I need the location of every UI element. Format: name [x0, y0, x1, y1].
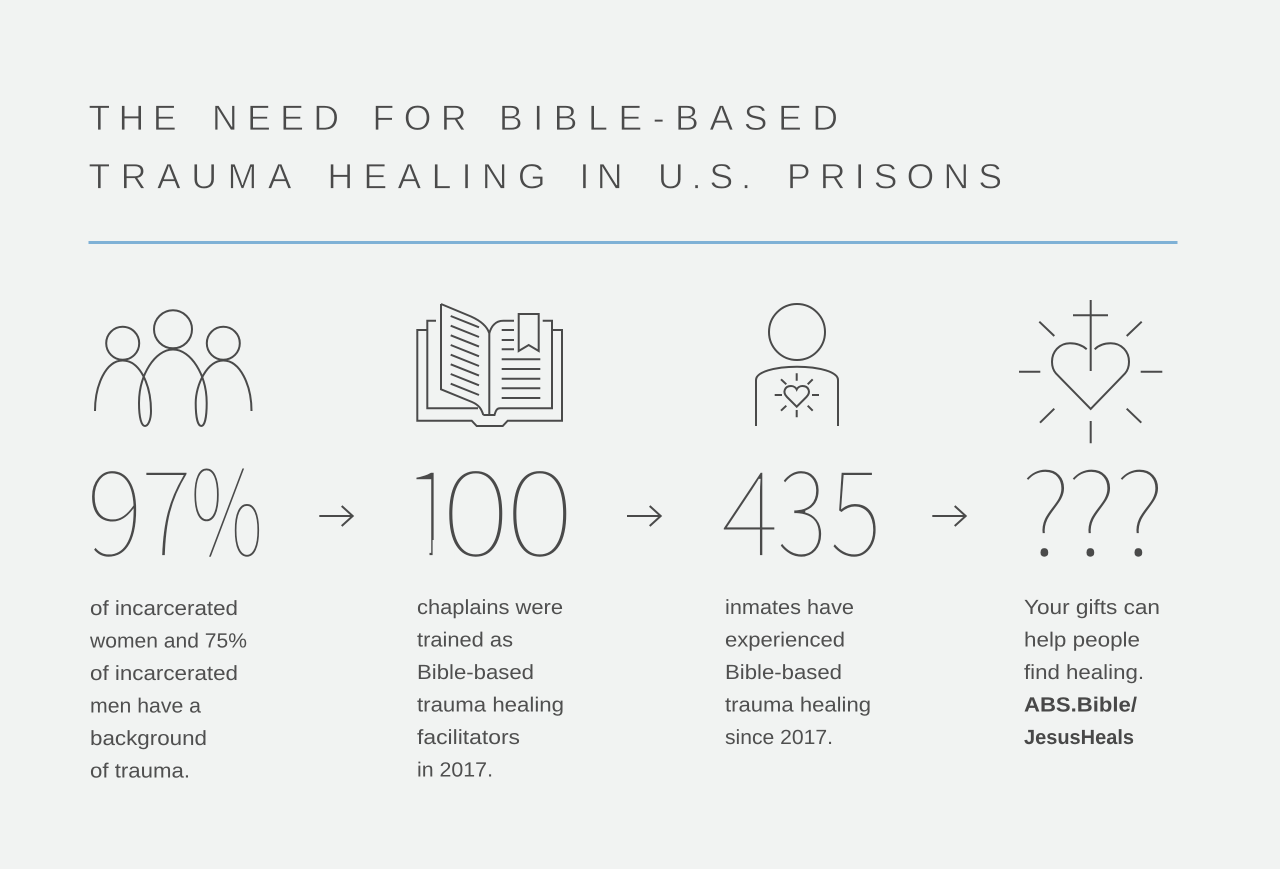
description: 435: trauma healing: [725, 694, 871, 716]
description: call to action: JesusHeals: [1024, 726, 1134, 749]
description: call to action: help people: [1024, 628, 1140, 652]
arrow: [627, 506, 661, 526]
stat number: 435: 3: [777, 418, 827, 591]
title: PRISONS: [787, 156, 1002, 196]
stat number: 435: 5: [830, 418, 882, 591]
description: 100: [417, 596, 564, 782]
description: 100: trauma healing: [417, 694, 564, 716]
title: [88, 98, 1002, 196]
description: call to action: Your gifts can: [1024, 596, 1160, 619]
stat number: 97%: 7: [141, 418, 192, 591]
panel: 435 inmates: [721, 304, 882, 749]
description: 435: [725, 596, 871, 749]
stat number: 100: 0: [505, 418, 575, 591]
icon: open book: [417, 304, 562, 426]
stat number: 100: 1: [400, 418, 460, 591]
description: 435: experienced: [725, 628, 845, 652]
stat number: 435: [721, 418, 882, 591]
icon: person with glowing heart: [756, 304, 838, 426]
title: BIBLE-BASED: [499, 98, 838, 138]
description: 100: chaplains were: [417, 596, 563, 619]
icon: three people: [95, 310, 252, 426]
description: 97%: men have a: [90, 694, 202, 718]
title: TRAUMA: [88, 156, 292, 196]
icon: heart with cross and rays: [1019, 300, 1162, 443]
description: 97%: [89, 597, 247, 782]
description: 100: facilitators: [417, 726, 520, 749]
description: 97%: of trauma.: [90, 760, 190, 782]
description: 435: inmates have: [725, 596, 854, 619]
description: call to action: ABS.Bible/: [1024, 694, 1137, 716]
panel: 97% statistic: [86, 310, 264, 782]
title: FOR: [372, 98, 466, 138]
arrow: [932, 506, 966, 526]
arrow: [319, 506, 353, 526]
title: NEED: [212, 98, 339, 138]
stat number: 97%: [86, 418, 264, 591]
stat number: 97%: 9: [86, 418, 143, 591]
description: 435: since 2017.: [725, 726, 833, 749]
description: call to action: [1024, 596, 1160, 749]
description: 97%: women and 75%: [89, 630, 247, 652]
stat number: 435: 4: [721, 418, 779, 591]
title: THE: [88, 98, 176, 138]
stat number: question marks: ???: [1021, 422, 1165, 590]
description: 100: trained as: [417, 628, 513, 652]
title: U.S.: [658, 156, 751, 196]
stat number: 100: [400, 418, 575, 591]
description: 100: in 2017.: [417, 758, 493, 782]
stat number: 97%: %: [190, 418, 264, 591]
panel: call to action: [1019, 300, 1165, 749]
description: 100: Bible-based: [417, 661, 534, 684]
title: HEALING: [328, 156, 546, 196]
description: 435: Bible-based: [725, 661, 842, 684]
description: call to action: find healing.: [1024, 661, 1144, 684]
description: 97%: of incarcerated: [90, 662, 238, 685]
panel: 100 chaplains: [400, 304, 575, 782]
title: IN: [580, 156, 622, 196]
stat number: 100: 0: [441, 418, 511, 591]
description: 97%: of incarcerated: [90, 597, 238, 620]
description: 97%: background: [90, 727, 207, 750]
